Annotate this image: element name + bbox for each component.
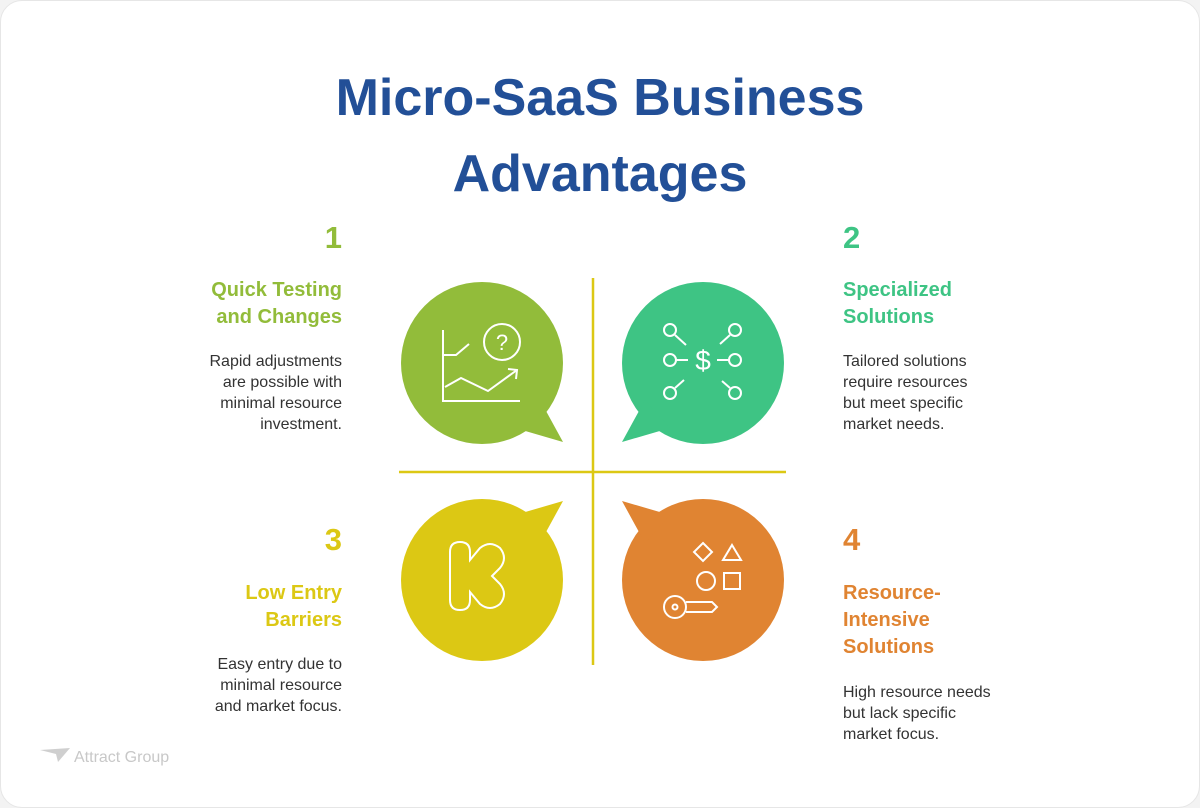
title [336,69,864,203]
bubble 4 [622,499,784,661]
text 1: Rapid adjustments are possible with minimal resource investment. [209,353,342,433]
heading 3: Low Entry Barriers [245,582,342,631]
bubble 1 [401,282,563,444]
bubble 2 [622,282,784,444]
number 3: 3 [325,522,342,557]
number 4: 4 [843,522,860,557]
bubble 1: ? [496,330,508,355]
text 2: Tailored solutions require resources but meet specific market needs. [843,353,968,433]
logo [40,748,169,766]
bubble 3 [401,499,563,661]
item 2 [843,220,968,433]
number 2: 2 [843,220,860,255]
heading 4: Resource-Intensive Solutions [843,582,941,658]
text 3: Easy entry due to minimal resource and market focus. [215,656,342,715]
item 4 [843,522,991,743]
bubble 2: $ [695,345,711,376]
title: Advantages [453,145,747,203]
text 4: High resource needs but lack specific market focus. [843,684,991,743]
heading 2: Specialized Solutions [843,279,952,328]
item 1 [209,220,342,433]
number 1: 1 [325,220,342,255]
item 3 [215,522,342,715]
title: Micro-SaaS Business [336,69,864,127]
heading 1: Quick Testing and Changes [211,279,342,328]
logo: Attract Group [74,749,169,766]
